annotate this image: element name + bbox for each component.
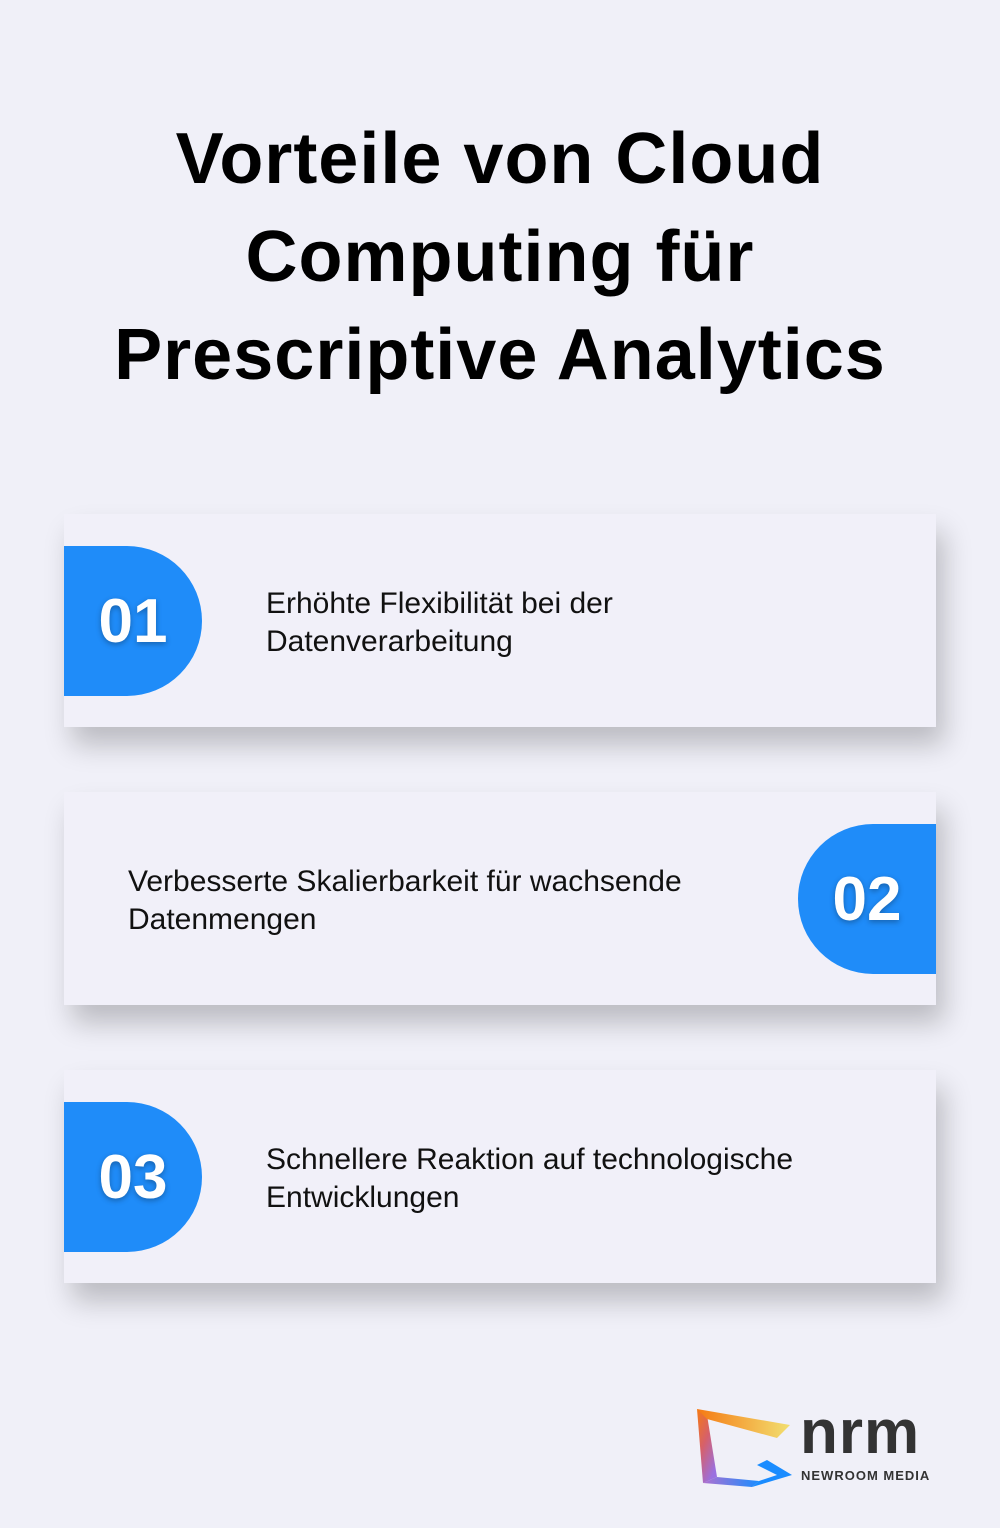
- text 1: Erhöhte Flexibilität bei der: [266, 587, 613, 620]
- badge 02: [798, 824, 936, 974]
- title: Vorteile von Cloud: [176, 119, 824, 199]
- badge 02: 02: [833, 864, 901, 934]
- badge 03: 03: [99, 1142, 167, 1212]
- badge 03: [64, 1102, 202, 1252]
- text 1: [266, 587, 613, 658]
- title: Prescriptive Analytics: [114, 315, 886, 395]
- text 2: Verbesserte Skalierbarkeit für wachsende: [128, 865, 682, 898]
- text 2: [128, 865, 682, 936]
- logo text: nrm: [800, 1398, 920, 1467]
- text 3: [266, 1143, 793, 1214]
- title: [114, 119, 886, 395]
- text 2: Datenmengen: [128, 903, 316, 936]
- logo: [697, 1398, 930, 1487]
- icon: logo mark: [697, 1409, 792, 1487]
- text 3: Schnellere Reaktion auf technologische: [266, 1143, 793, 1176]
- title: Computing für: [246, 217, 754, 297]
- text 1: Datenverarbeitung: [266, 625, 513, 658]
- logo: NEWROOM MEDIA: [801, 1468, 930, 1483]
- text 3: Entwicklungen: [266, 1181, 459, 1214]
- card 1: [64, 514, 936, 727]
- card 2: [64, 792, 936, 1005]
- card 3: [64, 1070, 936, 1283]
- badge 01: [64, 546, 202, 696]
- badge 01: 01: [99, 586, 167, 656]
